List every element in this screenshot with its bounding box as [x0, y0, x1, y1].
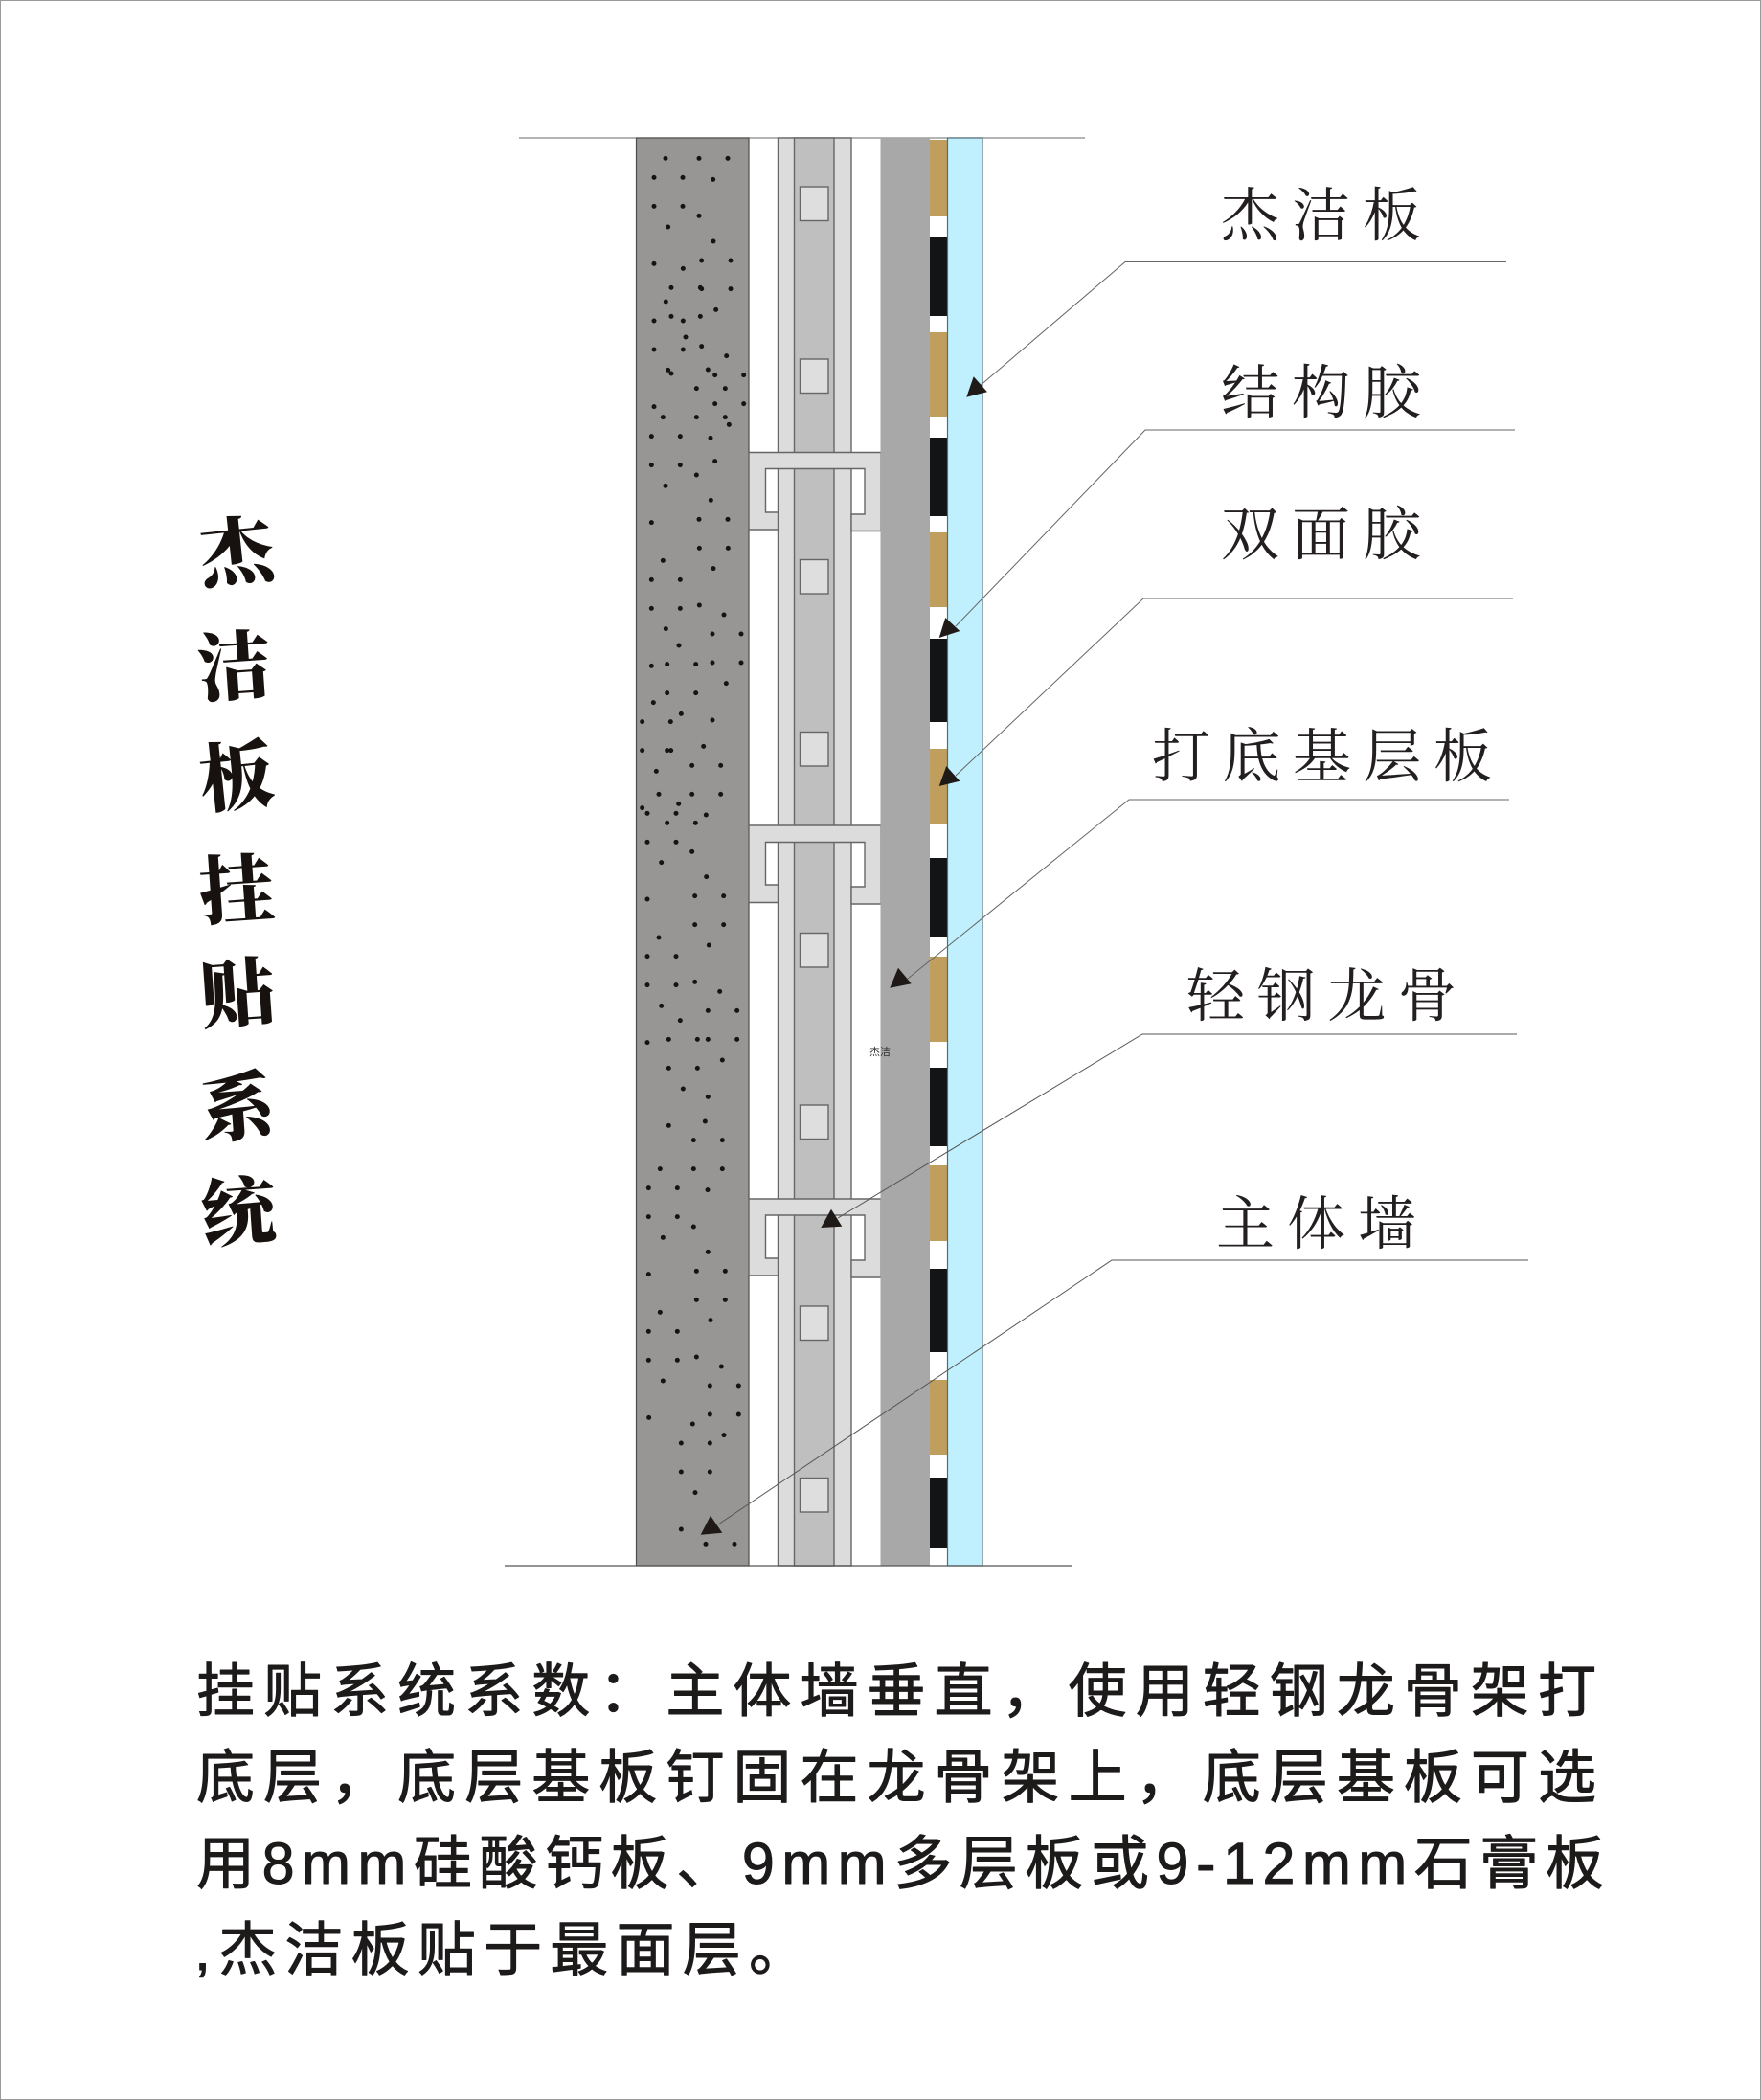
adhesive strip layer: double-sided tape and structural glue [930, 140, 947, 1548]
description paragraph: 底层，底层基板钉固在龙骨架上，底层基板可选 [196, 1745, 1596, 1810]
base board layer [881, 138, 930, 1566]
callout: 杰洁板: 杰洁板 [1221, 185, 1421, 249]
callout: 轻钢龙骨 [821, 965, 1517, 1228]
main wall layer with aggregate dots [636, 138, 749, 1566]
title: vertical calligraphy heading: 板 [195, 733, 279, 824]
callout: 打底基层板 [890, 726, 1509, 988]
callout: 打底基层板: 打底基层板 [1152, 726, 1492, 790]
title: vertical calligraphy heading: 系 [197, 1064, 281, 1153]
description paragraph: ,杰洁板贴于最面层。 [194, 1917, 807, 1982]
callout: 结构胶: 结构胶 [1221, 362, 1423, 426]
wall section diagram [505, 138, 1085, 1566]
title: vertical calligraphy heading: 挂 [196, 847, 277, 936]
callout: 双面胶 [939, 504, 1513, 786]
description paragraph [194, 1659, 1604, 1982]
light steel keel channel [778, 138, 851, 1566]
callout: 杰洁板 [966, 185, 1506, 397]
title: vertical calligraphy heading: 贴 [197, 950, 278, 1039]
description paragraph: 挂贴系统系数：主体墙垂直，使用轻钢龙骨架打 [196, 1659, 1596, 1724]
small mark text: 杰洁 [869, 1046, 891, 1058]
title: vertical calligraphy heading: 杰 [195, 507, 285, 598]
callout: 结构胶 [939, 362, 1515, 638]
title: vertical calligraphy heading: 洁 [194, 623, 275, 712]
callout: 双面胶: 双面胶 [1221, 504, 1423, 568]
keel clips [749, 452, 881, 1277]
callout: 主体墙: 主体墙 [1216, 1193, 1416, 1257]
decorative panel layer [948, 138, 982, 1566]
title: vertical calligraphy heading [194, 507, 285, 1258]
title: vertical calligraphy heading: 统 [198, 1169, 284, 1258]
callout: 主体墙 [701, 1193, 1528, 1535]
callout: 轻钢龙骨: 轻钢龙骨 [1186, 965, 1456, 1029]
description paragraph: 用8mm硅酸钙板、9mm多层板或9-12mm石膏板 [196, 1831, 1604, 1896]
